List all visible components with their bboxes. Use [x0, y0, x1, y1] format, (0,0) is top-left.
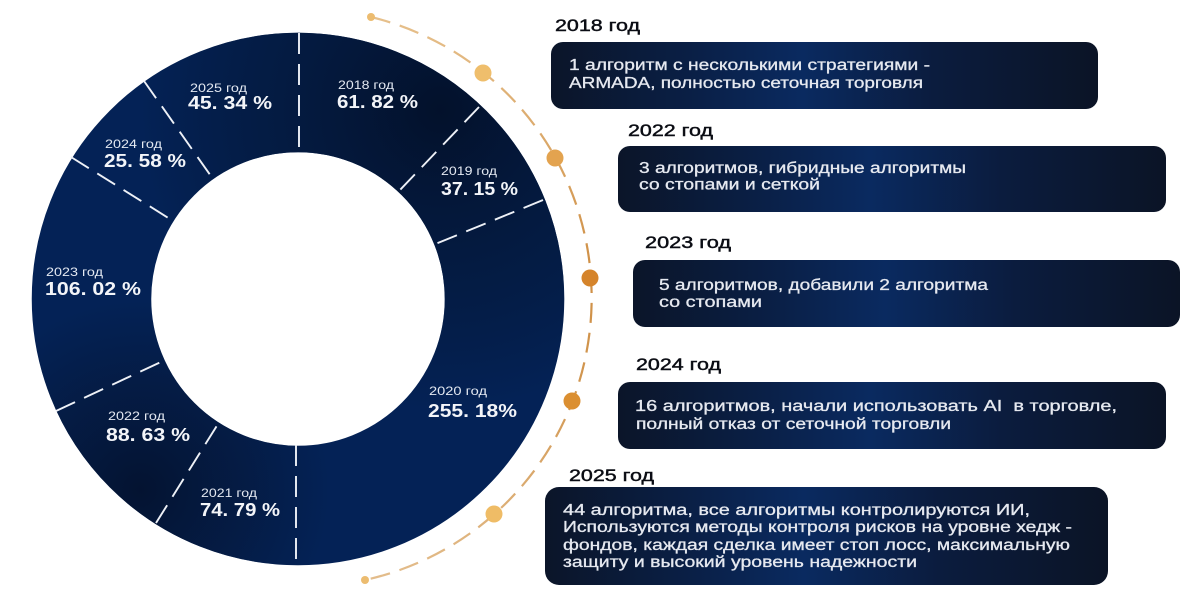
- label: 2023: 2023 год: [46, 265, 103, 279]
- label: 2025: 2025 год: [190, 81, 247, 95]
- label: 2019: [441, 164, 518, 199]
- label: 2024: [104, 137, 186, 171]
- card: 2023: [633, 260, 1180, 327]
- timeline arc: [361, 13, 598, 584]
- heading: 2018: 2018 год: [555, 16, 640, 35]
- label: 2024: 25. 58 %: [104, 151, 186, 171]
- label: 2019: 37. 15 %: [441, 179, 518, 199]
- label: 2022: 2022 год: [108, 409, 165, 423]
- card: 2024: [618, 382, 1166, 449]
- timeline dot: 2025: [486, 506, 502, 522]
- card: 2025: Используются методы контроля рисков на уровне хедж -: [563, 519, 1072, 536]
- label: 2021: [200, 486, 280, 520]
- card: 2025: фондов, каждая сделка имеет стоп лосс, максимальную: [563, 537, 1070, 554]
- timeline end dot: [361, 576, 369, 584]
- timeline dot: 2023: [582, 270, 598, 286]
- label: 2022: 88. 63 %: [106, 425, 190, 445]
- card: 2024: 16 алгоритмов, начали использовать AI в торговле,: [635, 398, 1117, 415]
- label: 2019: 2019 год: [441, 164, 497, 178]
- card: 2023: 5 алгоритмов, добавили 2 алгоритма: [659, 277, 988, 294]
- card: 2025: [545, 487, 1108, 585]
- label: 2025: [188, 81, 272, 113]
- timeline dot: 2018: [474, 64, 492, 82]
- card: 2023: со стопами: [659, 294, 762, 311]
- heading: 2024: 2024 год: [636, 355, 721, 374]
- label: 2018: 2018 год: [338, 78, 394, 92]
- card: 2018: 1 алгоритм с несколькими стратегиями -: [569, 57, 930, 74]
- label: 2020: 2020 год: [429, 384, 487, 398]
- heading: 2022: 2022 год: [628, 121, 713, 140]
- label: 2018: [337, 78, 418, 112]
- label: 2020: 255. 18%: [428, 401, 517, 421]
- label: 2022: [106, 409, 190, 445]
- card: 2024: полный отказ от сеточной торговли: [636, 416, 951, 433]
- timeline dot: 2022: [546, 150, 564, 166]
- label: 2021: 2021 год: [201, 486, 257, 500]
- card: 2018: [551, 42, 1098, 109]
- card: 2022: 3 алгоритмов, гибридные алгоритмы: [639, 160, 966, 177]
- card: 2022: со стопами и сеткой: [639, 176, 820, 194]
- label: 2020: [428, 384, 517, 421]
- donut chart: [45, 33, 543, 565]
- heading: 2025: 2025 год: [569, 466, 654, 485]
- label: 2025: 45. 34 %: [188, 93, 272, 113]
- label: 2018: 61. 82 %: [337, 92, 418, 112]
- timeline dot: 2024: [564, 392, 580, 410]
- timeline start dot: [367, 13, 375, 21]
- card: 2022: [618, 146, 1166, 212]
- card: 2025: 44 алгоритма, все алгоритмы контролируются ИИ,: [563, 502, 1030, 519]
- heading: 2023: 2023 год: [645, 233, 731, 252]
- label: 2024: 2024 год: [105, 137, 162, 151]
- card: 2025: защиту и высокий уровень надежности: [563, 554, 917, 571]
- label: 2021: 74. 79 %: [200, 500, 280, 520]
- card: 2018: ARMADA, полностью сеточная торговля: [569, 75, 923, 92]
- label: 2023: 106. 02 %: [45, 279, 141, 299]
- label: 2023: [45, 265, 141, 299]
